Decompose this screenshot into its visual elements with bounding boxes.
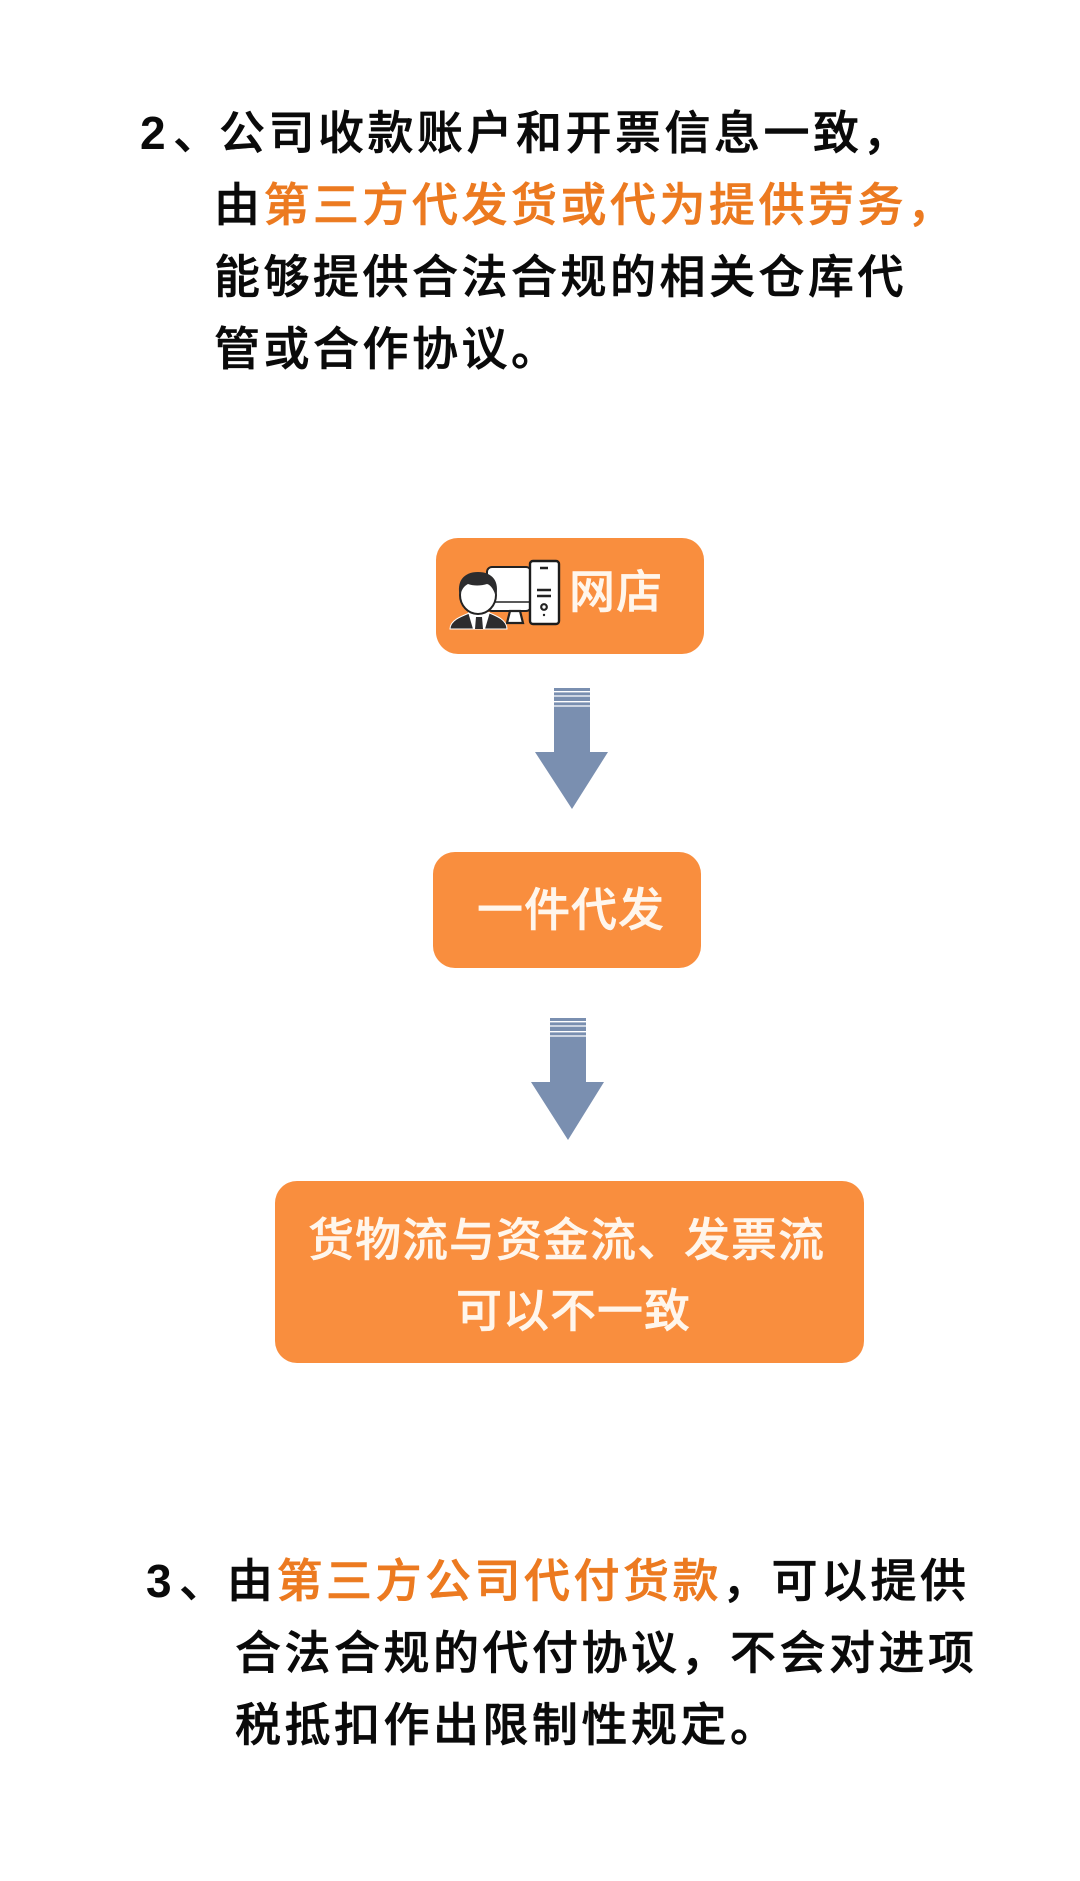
point 3 line 1 body with highlight: 由第三方公司代付货款，可以提供	[227, 1555, 970, 1607]
point 2 line 1: 2、	[140, 107, 223, 159]
point 2 line 3: 能够提供合法合规的相关仓库代	[214, 251, 907, 303]
label: online shop: 网店	[569, 566, 663, 618]
text block: point 2	[140, 107, 956, 375]
flow box: online shop	[436, 538, 704, 654]
label: line 1: 货物流与资金流、发票流	[308, 1214, 825, 1266]
arrow: down 1	[535, 688, 608, 809]
label: line 2: 可以不一致	[456, 1285, 691, 1337]
flow box: flows may differ	[275, 1181, 864, 1363]
point 2 line 2 with highlight: 由第三方代发货或代为提供劳务，	[214, 179, 956, 231]
label: dropshipping: 一件代发	[477, 884, 665, 936]
point 2 line 4: 管或合作协议。	[214, 323, 560, 375]
point 3 line 2: 合法合规的代付协议，不会对进项	[235, 1627, 978, 1679]
text block: point 3	[146, 1555, 978, 1751]
point 3 line 3: 税抵扣作出限制性规定。	[235, 1699, 780, 1751]
point 2 line 1 body: 公司收款账户和开票信息一致，	[219, 107, 912, 159]
point 3 line 1: 3、	[146, 1555, 229, 1607]
flow box: one-piece dropshipping	[433, 852, 701, 968]
arrow: down 2	[531, 1018, 604, 1140]
icon: person with computer	[450, 560, 560, 630]
